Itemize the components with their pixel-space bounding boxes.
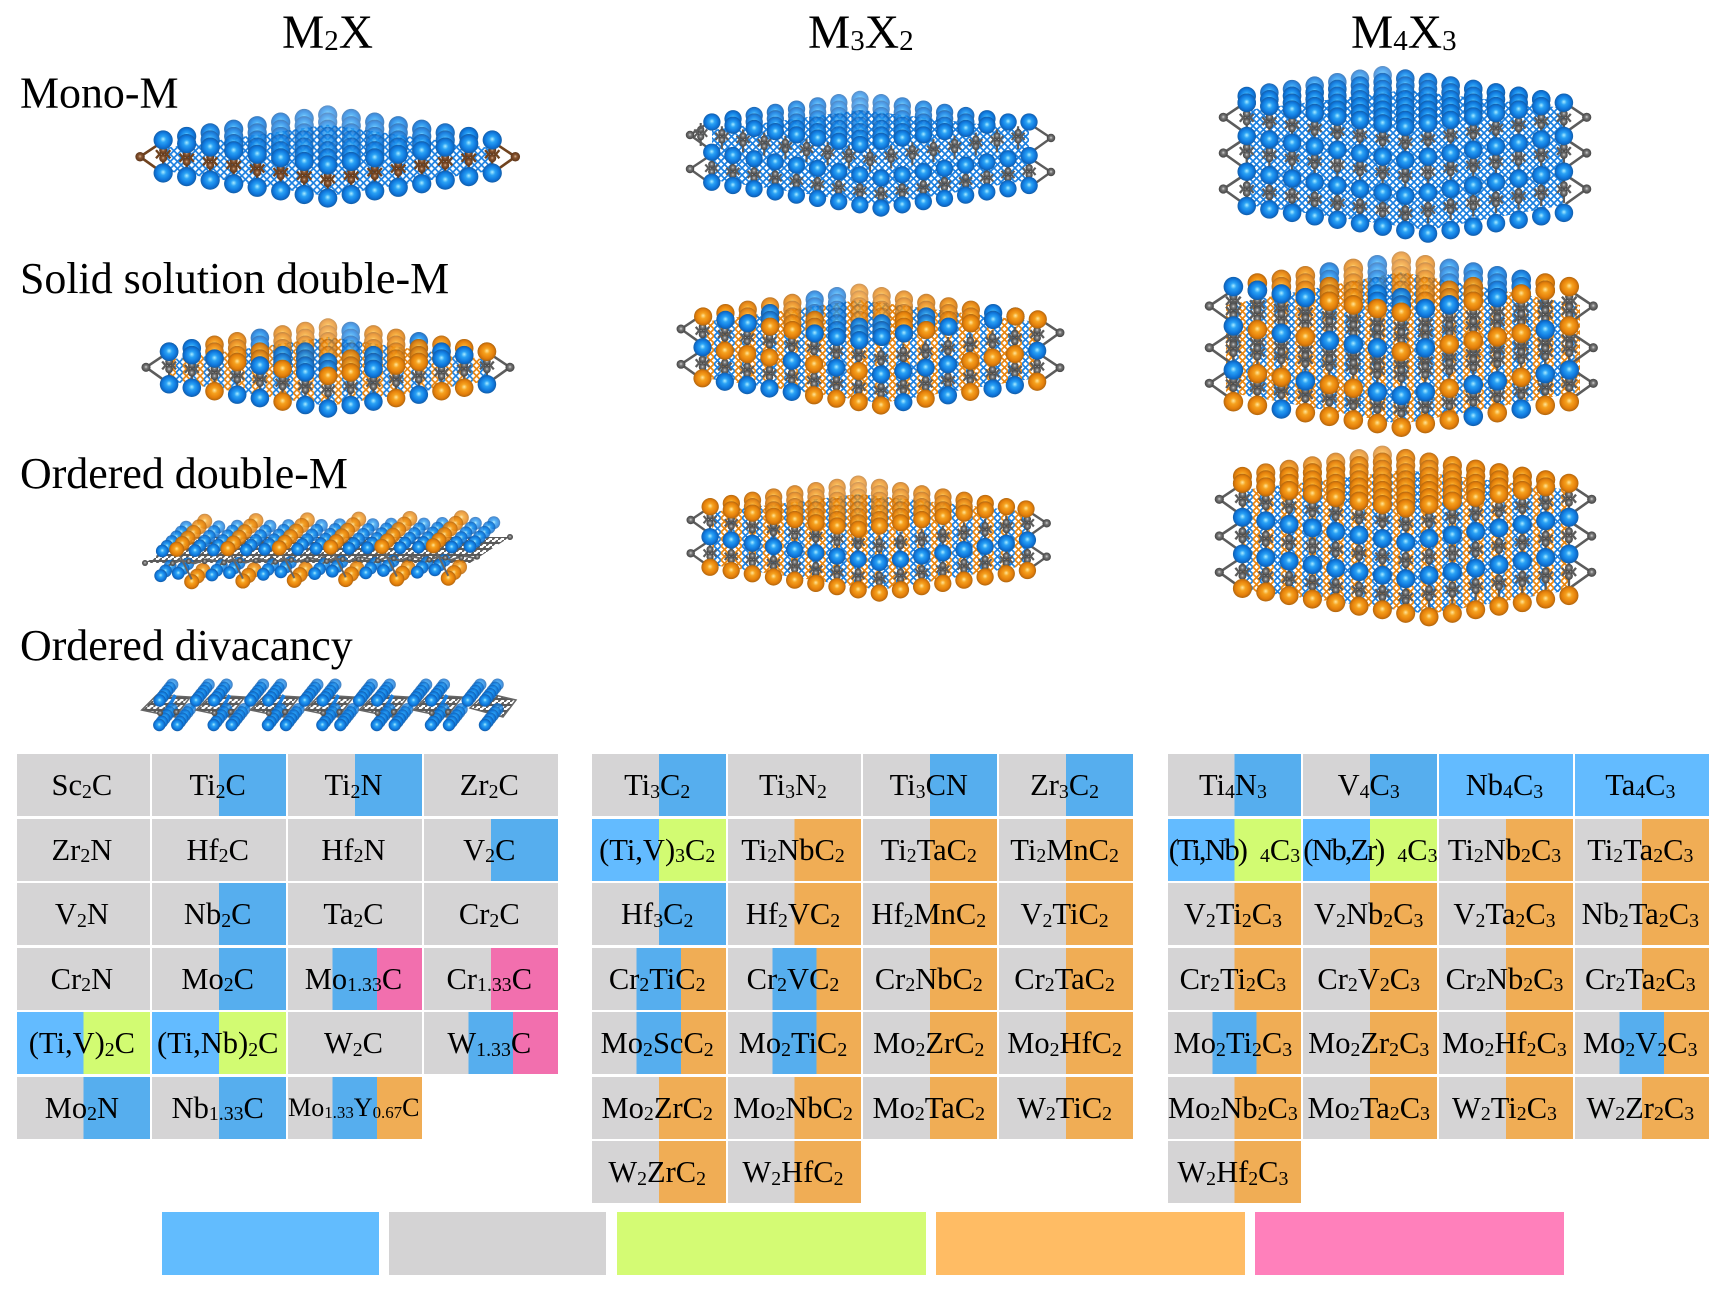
cell: W2ZrC2: W2ZrC2: [608, 1155, 706, 1190]
cell: Ti2N: [288, 754, 422, 816]
legend swatch: pink: [1255, 1212, 1564, 1275]
cell: Cr2TaC2: [999, 948, 1133, 1010]
cell: Mo2NbC2: Mo2NbC2: [733, 1090, 853, 1125]
cell: Nb2C: Nb2C: [184, 897, 251, 932]
cell: Ti3C2: [592, 754, 726, 816]
cell: Cr2Ti2C3: Cr2Ti2C3: [1180, 962, 1286, 996]
cell: (Ti,V)2C: (Ti,V)2C: [29, 1026, 135, 1061]
cell: W2Zr2C3: [1575, 1076, 1709, 1138]
cell: W2Ti2C3: W2Ti2C3: [1452, 1090, 1557, 1125]
cell: Mo1.33C: Mo1.33C: [305, 962, 402, 996]
cell: Hf2N: [288, 818, 422, 880]
cell: Mo2ZrC2: Mo2ZrC2: [602, 1090, 713, 1125]
column title: M3X2: X: [865, 7, 899, 59]
cell: Nb2C: [152, 883, 286, 945]
structure: mono-M M2X: [135, 105, 520, 208]
cell: Mo1.33C: [288, 948, 422, 1010]
cell: Hf2MnC2: [863, 883, 997, 945]
cell: W2C: W2C: [324, 1026, 383, 1061]
cell: V2Nb2C3: V2Nb2C3: [1314, 897, 1423, 932]
structure: solid solution M4X3: [1205, 251, 1598, 437]
cell: Ti2NbC2: Ti2NbC2: [741, 832, 845, 867]
cell: W2C: [288, 1012, 422, 1074]
cell: Hf2MnC2: Hf2MnC2: [871, 897, 986, 932]
cell: Ti2NbC2: [728, 818, 861, 880]
cell: Mo2ZrC2: [863, 1012, 997, 1074]
cell: Mo2C: Mo2C: [181, 962, 254, 996]
cell: Mo2Zr2C3: Mo2Zr2C3: [1308, 1026, 1429, 1061]
cell: (Ti,V)2C: [16, 1012, 150, 1074]
cell: (Ti,Nb)2C: (Ti,Nb)2C: [157, 1026, 278, 1061]
cell: Cr2NbC2: Cr2NbC2: [875, 962, 983, 996]
cell: Nb2Ta2C3: Nb2Ta2C3: [1582, 897, 1699, 932]
cell: Mo2Ti2C3: [1168, 1012, 1301, 1074]
cell: Hf2VC2: Hf2VC2: [746, 897, 840, 932]
cell: Ti3CN: [863, 754, 997, 816]
cell: V2N: [16, 883, 150, 945]
cell: Ti2C: [152, 754, 286, 816]
cell: Cr2VC2: [728, 948, 861, 1010]
cell: Hf2C: Hf2C: [186, 832, 249, 867]
cell: (Ti,Nb)4C3: (Ti,Nb) 4C3: [1169, 832, 1300, 867]
cell: Cr2N: Cr2N: [51, 962, 113, 996]
cell: Cr2Ti2C3: [1168, 948, 1301, 1010]
cell: W2ZrC2: [592, 1141, 726, 1203]
cell: Ti2Nb2C3: [1439, 818, 1573, 880]
cell: Mo2HfC2: [999, 1012, 1133, 1074]
cell: Hf2VC2: [728, 883, 861, 945]
cell: Cr2C: [424, 883, 558, 945]
cell: Nb4C3: Nb4C3: [1466, 768, 1543, 803]
cell: Ti4N3: [1168, 754, 1301, 816]
cell: Ti4N3: Ti4N3: [1199, 768, 1267, 803]
cell: Mo2ScC2: Mo2ScC2: [601, 1026, 714, 1061]
column title: M4X3: 3: [1442, 25, 1457, 57]
cell: Ti2MnC2: Ti2MnC2: [1010, 832, 1119, 867]
cell: W1.33C: [424, 1012, 558, 1074]
column title: M2X: 2: [324, 25, 339, 57]
cell: Cr1.33C: [424, 948, 558, 1010]
cell: Mo2Hf2C3: Mo2Hf2C3: [1442, 1026, 1567, 1061]
cell: Nb2Ta2C3: [1575, 883, 1709, 945]
cell: Zr3C2: Zr3C2: [1030, 768, 1099, 803]
cell: Mo2Ti2C3: Mo2Ti2C3: [1174, 1026, 1292, 1061]
cell: W2Hf2C3: W2Hf2C3: [1177, 1155, 1288, 1190]
column title: M4X3: M: [1351, 7, 1393, 59]
cell: Ta4C3: Ta4C3: [1605, 768, 1675, 803]
cell: Cr2C: Cr2C: [459, 897, 520, 932]
cell: (Ti,V)3C2: [592, 818, 726, 880]
cell: Ti2Ta2C3: [1575, 818, 1709, 880]
cell: Hf3C2: Hf3C2: [621, 897, 693, 932]
legend swatch: orange: [936, 1212, 1245, 1275]
cell: Mo2TaC2: [863, 1076, 997, 1138]
cell: V2Ti2C3: V2Ti2C3: [1184, 897, 1282, 932]
cell: Ti3N2: Ti3N2: [759, 768, 827, 803]
cell: Mo2NbC2: [728, 1076, 861, 1138]
cell: Cr2VC2: Cr2VC2: [747, 962, 839, 996]
structure: ordered double-M M2X: [142, 510, 513, 589]
structure: ordered divacancy M2X: [142, 678, 516, 731]
cell: Mo2ZrC2: [592, 1076, 726, 1138]
cell: Mo2Hf2C3: [1439, 1012, 1573, 1074]
cell: Nb1.33C: Nb1.33C: [172, 1090, 264, 1125]
cell: V2TiC2: [999, 883, 1133, 945]
column title: M3X2: M: [808, 7, 850, 59]
row label: Ordered double-M: Ordered double-M: [20, 450, 348, 498]
legend swatch: blue: [162, 1212, 379, 1275]
cell: Hf2C: [152, 818, 286, 880]
cell: Ti3C2: Ti3C2: [624, 768, 690, 803]
cell: Mo2C: [152, 948, 286, 1010]
cell: (Ti,V)3C2: (Ti,V)3C2: [599, 832, 715, 867]
cell: W2Hf2C3: [1168, 1141, 1301, 1203]
cell: Nb4C3: [1439, 754, 1573, 816]
table: M3X2 compositions: [592, 754, 1133, 1203]
table: M2X compositions: [17, 754, 558, 1139]
cell: Sc2C: [16, 754, 150, 816]
cell: V2C: [424, 818, 558, 880]
cell: Mo1.33Y0.67C: [288, 1076, 422, 1138]
column title: M3X2: 2: [899, 25, 914, 57]
column title: M4X3: X: [1408, 7, 1442, 59]
cell: Ti2N: Ti2N: [324, 768, 382, 803]
cell: Zr2N: Zr2N: [52, 832, 112, 867]
cell: Ta2C: [288, 883, 422, 945]
cell: (Nb,Zr)4C3: (Nb,Zr) 4C3: [1303, 832, 1437, 867]
column title: M4X3: 4: [1393, 25, 1408, 57]
cell: Mo2N: Mo2N: [45, 1090, 119, 1125]
cell: Ti2Ta2C3: Ti2Ta2C3: [1587, 832, 1693, 867]
structure: ordered double-M M4X3: [1215, 446, 1596, 626]
cell: Ti3N2: [728, 754, 861, 816]
cell: (Ti,Nb)2C: [152, 1012, 286, 1074]
row label: Solid solution double-M: Solid solution double-M: [20, 255, 449, 303]
legend swatch: green: [617, 1212, 926, 1275]
cell: V2C: V2C: [463, 832, 515, 867]
cell: Cr2V2C3: Cr2V2C3: [1317, 962, 1420, 996]
cell: (Nb,Zr)4C3: [1303, 818, 1437, 880]
cell: Mo2HfC2: Mo2HfC2: [1007, 1026, 1122, 1061]
cell: Mo2TiC2: [728, 1012, 861, 1074]
cell: Ti2TaC2: [863, 818, 997, 880]
cell: Ti2TaC2: Ti2TaC2: [881, 832, 977, 867]
structure: mono-M M4X3: [1219, 66, 1591, 243]
cell: (Ti,Nb)4C3: [1168, 818, 1301, 880]
cell: Mo2Nb2C3: [1168, 1076, 1301, 1138]
row label: Mono-M: Mono-M: [20, 70, 179, 118]
cell: Sc2C: Sc2C: [52, 768, 112, 803]
cell: V2Nb2C3: [1303, 883, 1437, 945]
cell: Zr3C2: [999, 754, 1133, 816]
cell: Zr2N: [16, 818, 150, 880]
cell: Mo1.33Y0.67C: Mo1.33Y0.67C: [288, 1092, 419, 1122]
cell: W2Zr2C3: W2Zr2C3: [1586, 1090, 1694, 1125]
cell: W2TiC2: [999, 1076, 1133, 1138]
cell: Ti2C: Ti2C: [190, 768, 246, 803]
cell: Mo2N: [16, 1076, 150, 1138]
cell: Cr2Nb2C3: Cr2Nb2C3: [1446, 962, 1563, 996]
cell: Cr2NbC2: [863, 948, 997, 1010]
cell: Ta4C3: [1575, 754, 1709, 816]
cell: Ti2MnC2: [999, 818, 1133, 880]
structure: mono-M M3X2: [686, 91, 1055, 217]
cell: Mo2V2C3: [1575, 1012, 1709, 1074]
cell: Mo2Nb2C3: Mo2Nb2C3: [1168, 1090, 1298, 1125]
structure: solid solution M3X2: [677, 284, 1064, 415]
cell: W2TiC2: W2TiC2: [1017, 1090, 1112, 1125]
cell: V2TiC2: V2TiC2: [1020, 897, 1109, 932]
cell: Hf2N: Hf2N: [321, 832, 386, 867]
cell: Mo2Ta2C3: Mo2Ta2C3: [1307, 1090, 1430, 1125]
column title: M2X: M: [282, 7, 324, 59]
cell: Mo2V2C3: Mo2V2C3: [1583, 1026, 1698, 1061]
cell: Cr2Nb2C3: [1439, 948, 1573, 1010]
cell: W1.33C: W1.33C: [447, 1026, 531, 1061]
cell: V2Ta2C3: V2Ta2C3: [1453, 897, 1556, 932]
cell: Ta2C: Ta2C: [323, 897, 384, 932]
cell: Ti2Nb2C3: Ti2Nb2C3: [1448, 832, 1561, 867]
table: M4X3 compositions: [1168, 754, 1709, 1203]
cell: Hf3C2: [592, 883, 726, 945]
cell: Zr2C: [424, 754, 558, 816]
cell: V4C3: V4C3: [1338, 768, 1400, 803]
cell: Cr2Ta2C3: [1575, 948, 1709, 1010]
cell: Cr2TiC2: Cr2TiC2: [609, 962, 706, 996]
cell: Mo2Ta2C3: [1303, 1076, 1437, 1138]
cell: V2Ta2C3: [1439, 883, 1573, 945]
cell: Mo2TiC2: Mo2TiC2: [739, 1026, 847, 1061]
cell: Mo2ZrC2: Mo2ZrC2: [873, 1026, 984, 1061]
cell: Mo2Zr2C3: [1303, 1012, 1437, 1074]
structure: ordered double-M M3X2: [686, 476, 1051, 602]
cell: Cr1.33C: Cr1.33C: [447, 962, 532, 996]
cell: W2HfC2: [728, 1141, 861, 1203]
cell: V2N: V2N: [55, 897, 109, 932]
cell: Cr2N: [16, 948, 150, 1010]
cell: Cr2Ta2C3: Cr2Ta2C3: [1585, 962, 1696, 996]
column title: M2X: X: [339, 7, 373, 59]
cell: W2HfC2: W2HfC2: [742, 1155, 844, 1190]
cell: Cr2V2C3: [1303, 948, 1437, 1010]
column title: M3X2: 3: [850, 25, 865, 57]
cell: Cr2TaC2: Cr2TaC2: [1014, 962, 1115, 996]
row label: Ordered divacancy: Ordered divacancy: [20, 622, 353, 670]
cell: V4C3: [1303, 754, 1437, 816]
structure: solid solution M2X: [141, 318, 515, 418]
cell: W2Ti2C3: [1439, 1076, 1573, 1138]
cell: Ti3CN: Ti3CN: [890, 768, 968, 803]
legend swatch: gray: [389, 1212, 606, 1275]
cell: Mo2TaC2: Mo2TaC2: [872, 1090, 985, 1125]
cell: Mo2ScC2: [592, 1012, 726, 1074]
cell: Zr2C: Zr2C: [460, 768, 519, 803]
cell: Cr2TiC2: [592, 948, 726, 1010]
cell: Nb1.33C: [152, 1076, 286, 1138]
cell: V2Ti2C3: [1168, 883, 1301, 945]
